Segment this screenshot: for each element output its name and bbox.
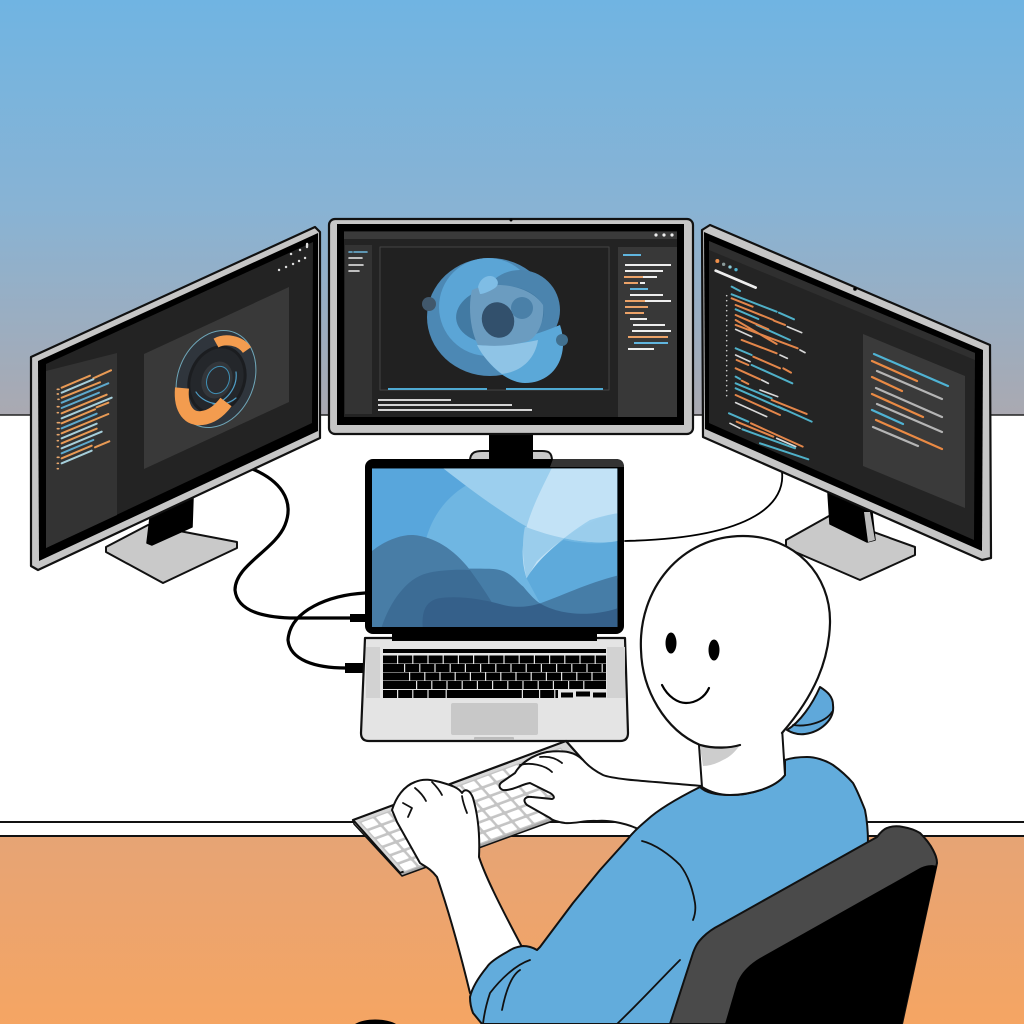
laptop base: [361, 638, 628, 741]
right monitor frame: [702, 225, 991, 560]
center monitor stand neck and base: [470, 432, 552, 462]
person: [392, 536, 870, 1024]
neck: [699, 728, 785, 795]
right arm: [500, 751, 702, 830]
desk surface: [0, 415, 1024, 836]
laptop lid: [365, 459, 624, 634]
right monitor screen: [709, 241, 975, 540]
center monitor: [329, 218, 693, 462]
cables: [235, 468, 782, 673]
center monitor left sidebar: [345, 245, 372, 414]
left monitor: [31, 227, 320, 583]
left monitor frame: [31, 227, 320, 570]
laptop wallpaper: [372, 468, 617, 627]
right monitor stand: [786, 493, 915, 580]
right monitor title bar: [709, 241, 975, 360]
center monitor canvas frame: [380, 247, 609, 390]
neck shadow: [700, 745, 740, 766]
blue shirt: [470, 757, 870, 1024]
laptop speaker grilles: [366, 647, 625, 698]
right hand finger lines: [520, 757, 562, 772]
orange floor band: [0, 836, 1024, 1024]
face: eyes and smile: [662, 632, 720, 703]
laptop trackpad: [451, 703, 538, 740]
left monitor stand: [106, 498, 237, 583]
laptop keyboard: [383, 649, 606, 695]
head: [641, 536, 830, 748]
center monitor screen: [344, 231, 677, 417]
center monitor right code panel: [618, 247, 677, 417]
hair bun: [787, 687, 833, 734]
right monitor traffic dots and title: [715, 259, 756, 288]
right monitor: [702, 225, 991, 580]
external keyboard: [353, 741, 613, 876]
laptop hinge: [392, 632, 597, 641]
right monitor code editor: [715, 259, 812, 459]
left monitor donut chart: [162, 318, 270, 440]
center monitor frame: [329, 219, 693, 434]
wall background: [0, 0, 1024, 415]
office chair: [355, 826, 937, 1024]
right monitor side panel: [863, 334, 965, 508]
left monitor screen: [46, 242, 313, 548]
right monitor bezel: [704, 232, 983, 551]
left monitor code sidebar: [46, 353, 117, 548]
left arm: [392, 780, 522, 1000]
right monitor webcam: [853, 287, 857, 291]
left monitor window dots: [279, 244, 307, 270]
abstract blue blobs chart: [422, 258, 568, 383]
center monitor timeline: [388, 388, 603, 390]
left monitor main panel: [144, 287, 289, 469]
left hand finger lines: [403, 782, 467, 817]
left monitor bezel: [38, 233, 318, 561]
center monitor bezel: [337, 224, 684, 425]
center monitor text lines: [378, 400, 532, 410]
center monitor webcam: [510, 218, 512, 222]
center monitor title bar: [344, 232, 677, 239]
laptop: [361, 459, 628, 741]
